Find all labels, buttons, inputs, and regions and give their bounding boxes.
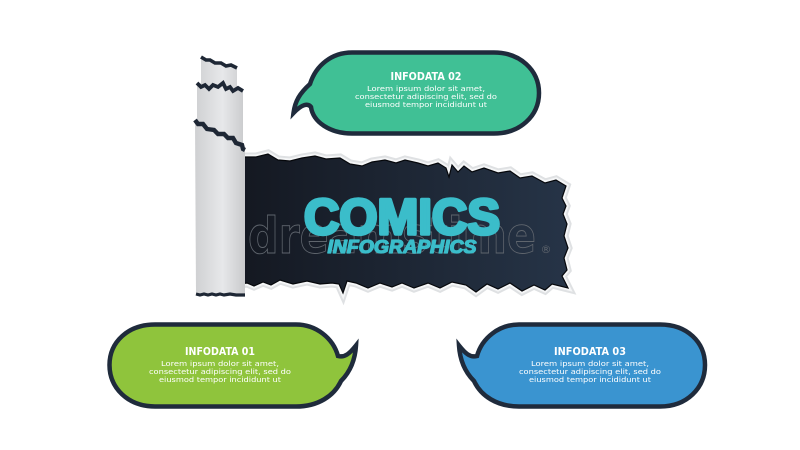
- roll bottom tear: [196, 294, 245, 295]
- bubble: infodata 03: [459, 324, 705, 406]
- bubble shape green: [294, 52, 539, 134]
- body text: Lorem ipsum dolor sit amet,: [367, 84, 485, 93]
- body text: consectetur adipiscing elit, sed do: [355, 92, 498, 101]
- body text: [519, 359, 662, 384]
- torn edge: inner white band: [240, 154, 568, 293]
- torn dark background: [240, 154, 568, 293]
- body text: [149, 359, 292, 384]
- watermark registered mark: ®: [540, 243, 552, 256]
- body text: consectetur adipiscing elit, sed do: [149, 367, 292, 376]
- body text: Lorem ipsum dolor sit amet,: [531, 359, 649, 368]
- bubble: infodata 01: [110, 324, 356, 406]
- subtitle: INFOGRAPHICS: INFOGRAPHICS: [328, 237, 476, 257]
- watermark: dreamstime: [248, 207, 536, 265]
- roll middle tear: [197, 83, 243, 91]
- body text: eiusmod tempor incididunt ut: [529, 375, 651, 384]
- roll main body: [195, 120, 245, 294]
- torn dark panel: [240, 154, 568, 293]
- body text: [355, 84, 498, 109]
- bubble shape blue: [459, 324, 705, 406]
- roll lower tear: [195, 120, 245, 150]
- roll middle tier: [197, 83, 243, 152]
- heading: INFODATA 03: [554, 346, 626, 358]
- roll top tier: [201, 57, 237, 95]
- bubble: infodata 02: [294, 52, 539, 134]
- heading: INFODATA 01: [185, 346, 255, 358]
- body text: consectetur adipiscing elit, sed do: [519, 367, 662, 376]
- body text: eiusmod tempor incididunt ut: [365, 100, 487, 109]
- body text: Lorem ipsum dolor sit amet,: [161, 359, 279, 368]
- title: COMICS: COMICS: [304, 189, 500, 245]
- bubble shape lime: [110, 324, 356, 406]
- body text: eiusmod tempor incididunt ut: [159, 375, 281, 384]
- heading: INFODATA 02: [390, 71, 462, 83]
- torn edge: outer grey band: [240, 154, 568, 293]
- roll top tear: [201, 57, 237, 68]
- paper roll: [195, 57, 245, 295]
